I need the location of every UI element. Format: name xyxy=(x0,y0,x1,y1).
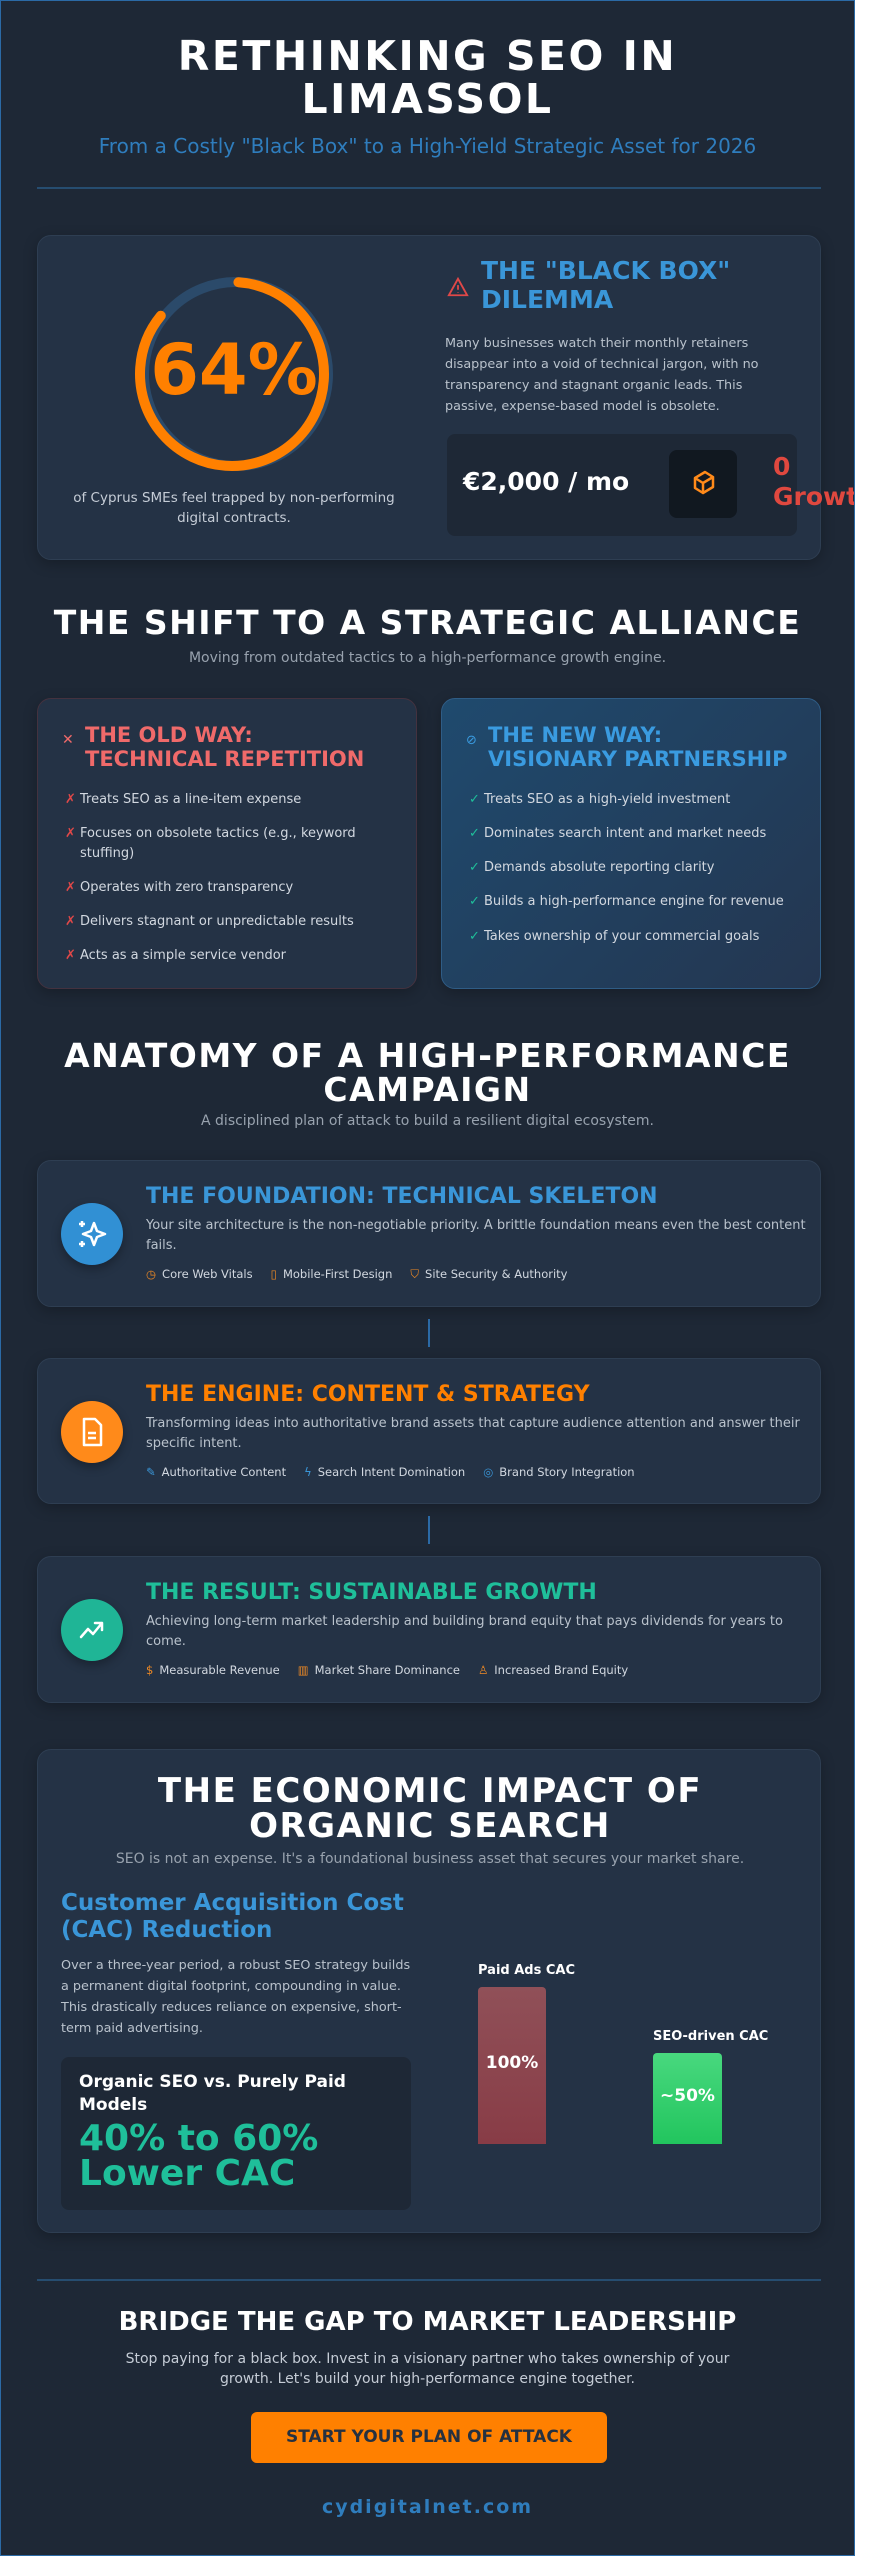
title: LIMASSOL xyxy=(301,75,554,123)
title: RETHINKING SEO IN xyxy=(178,32,677,80)
heading: CAC xyxy=(61,1890,404,1943)
subtitle: From a Costly "Black Box" to a High-Yield Strategic Asset for 2026 xyxy=(99,134,756,158)
panel: economic impact xyxy=(37,1749,821,2233)
icon: cube xyxy=(669,450,737,518)
panel: old way: ✗ xyxy=(65,914,76,929)
heading: old way xyxy=(62,723,364,771)
subtitle: economic: SEO is not an expense. It's a foundational business asset that secures your market share. xyxy=(116,1851,744,1867)
subtitle: shift: Moving from outdated tactics to a high-performance growth engine. xyxy=(189,650,666,666)
heading: economic: ORGANIC SEARCH xyxy=(249,1806,611,1846)
list: old way: Delivers stagnant or unpredictable results xyxy=(80,914,354,929)
bar chart xyxy=(478,1963,768,2144)
panel: new way: ✓ xyxy=(469,792,480,807)
cost box: €2,000 / mo xyxy=(463,467,629,496)
list: new way: Demands absolute reporting clarity xyxy=(484,860,714,875)
tags: foundation: ◷ Core Web Vitals ▯ Mobile-First Design ⛉ Site Security & Authority xyxy=(146,1267,567,1281)
heading: economic xyxy=(158,1771,702,1846)
heading: economic: THE ECONOMIC IMPACT OF xyxy=(158,1771,702,1811)
tags: result: $ Measurable Revenue ▥ Market Share Dominance ♙ Increased Brand Equity xyxy=(146,1663,628,1677)
panel: new way: ✓ xyxy=(469,929,480,944)
list: new way: Takes ownership of your commercial goals xyxy=(484,929,759,944)
heading: old way: TECHNICAL REPETITION xyxy=(85,747,364,771)
CTA button xyxy=(251,2412,607,2463)
icon: trend xyxy=(61,1599,123,1661)
panel: engine: THE ENGINE: CONTENT & STRATEGY xyxy=(146,1382,590,1407)
panel: old way: ✗ xyxy=(65,826,76,841)
list: old way: Operates with zero transparency xyxy=(80,880,293,895)
heading: anatomy: ANATOMY OF A HIGH-PERFORMANCE xyxy=(64,1036,791,1075)
panel: engine: Transforming ideas into authoritative brand assets that capture audience attention and answer their specific intent. xyxy=(146,1416,800,1451)
list: old way: Treats SEO as a line-item expense xyxy=(80,792,301,807)
list: new way: Dominates search intent and market needs xyxy=(484,826,766,841)
heading: black box dilemma: DILEMMA xyxy=(481,285,613,314)
heading: CAC: (CAC) Reduction xyxy=(61,1917,272,1943)
stat box: Organic SEO vs. Purely Paid Models xyxy=(79,2072,346,2115)
subtitle: anatomy: A disciplined plan of attack to build a resilient digital ecosystem. xyxy=(201,1113,654,1129)
panel: old way: ✕ xyxy=(62,732,74,748)
icon: warning xyxy=(447,277,469,296)
list: old way: Acts as a simple service vendor xyxy=(80,948,286,963)
panel: old way: ✗ xyxy=(65,948,76,963)
panel: new way: ✓ xyxy=(469,860,480,875)
panel: new way: ✓ xyxy=(469,894,480,909)
heading: old way: THE OLD WAY: xyxy=(85,723,253,747)
panel: old way: ✗ xyxy=(65,792,76,807)
list: old way: Focuses on obsolete tactics (e.g., keyword stuffing) xyxy=(80,826,356,861)
panel: foundation: THE FOUNDATION: TECHNICAL SKELETON xyxy=(146,1184,658,1209)
paragraph: CAC: Over a three-year period, a robust SEO strategy builds a permanent digital footprint, compounding in value. This drastically reduces reliance on expensive, short-term paid advertising. xyxy=(61,1958,410,2036)
list: new way xyxy=(469,792,784,944)
panel: result: THE RESULT: SUSTAINABLE GROWTH xyxy=(146,1580,597,1605)
bar chart: SEO-driven CAC xyxy=(653,2029,768,2044)
footer url: cydigitalnet.com xyxy=(322,2496,533,2518)
panel: black box dilemma xyxy=(37,235,821,560)
cost box: 0 xyxy=(773,452,790,481)
stat box xyxy=(61,2057,411,2210)
heading: shift: THE SHIFT TO A STRATEGIC ALLIANCE xyxy=(54,603,801,642)
panel: new way: ⊘ xyxy=(466,733,477,748)
heading: black box dilemma: THE "BLACK BOX" xyxy=(481,256,730,285)
heading: new way xyxy=(466,723,788,771)
tags: engine: ✎ Authoritative Content ϟ Search Intent Domination ◎ Brand Story Integration xyxy=(146,1465,635,1479)
panel: old way: ✗ xyxy=(65,880,76,895)
panel: new way xyxy=(441,698,821,989)
list: new way: Builds a high-performance engine for revenue xyxy=(484,894,784,909)
heading: new way: THE NEW WAY: xyxy=(488,723,662,747)
title xyxy=(178,32,677,123)
cost box xyxy=(447,434,797,536)
heading: CAC: Customer Acquisition Cost xyxy=(61,1890,404,1916)
stat box: 40% to 60% xyxy=(79,2118,318,2159)
bar chart: 100% xyxy=(486,2053,538,2073)
CTA button: START YOUR PLAN OF ATTACK xyxy=(286,2427,572,2447)
stat caption: of Cyprus SMEs feel trapped by non-performing digital contracts. xyxy=(73,490,395,526)
bar chart: Paid Ads CAC xyxy=(478,1963,575,1978)
icon: sparkle xyxy=(61,1203,123,1265)
chart: 64% ring: 64% xyxy=(150,329,318,411)
panel: engine xyxy=(37,1358,821,1504)
bar chart: ~50% xyxy=(660,2086,715,2106)
stat box: Lower CAC xyxy=(79,2153,295,2194)
panel: result: Achieving long-term market leadership and building brand equity that pays dividends for years to come. xyxy=(146,1614,783,1649)
panel: old way xyxy=(37,698,417,989)
list: new way: Treats SEO as a high-yield investment xyxy=(484,792,730,807)
chart: 64% ring xyxy=(135,277,333,471)
heading: anatomy: CAMPAIGN xyxy=(323,1070,532,1109)
panel: foundation: Your site architecture is the non-negotiable priority. A brittle foundation means even the best content fails. xyxy=(146,1218,806,1253)
panel: new way: ✓ xyxy=(469,826,480,841)
list: old way xyxy=(65,792,356,963)
heading: anatomy xyxy=(64,1036,791,1109)
icon: document xyxy=(61,1401,123,1463)
panel: foundation xyxy=(37,1160,821,1307)
heading: new way: VISIONARY PARTNERSHIP xyxy=(488,747,788,771)
paragraph: Many businesses watch their monthly retainers disappear into a void of technical jargon, with no transparency and stagnant organic leads. This passive, expense-based model is obsolete. xyxy=(445,336,759,414)
CTA text: Stop paying for a black box. Invest in a visionary partner who takes ownership of your growth. Let's build your high-performance engine together. xyxy=(126,2351,729,2387)
panel: result xyxy=(37,1556,821,1703)
CTA heading: BRIDGE THE GAP TO MARKET LEADERSHIP xyxy=(119,2307,736,2337)
heading: black box dilemma xyxy=(481,256,730,314)
